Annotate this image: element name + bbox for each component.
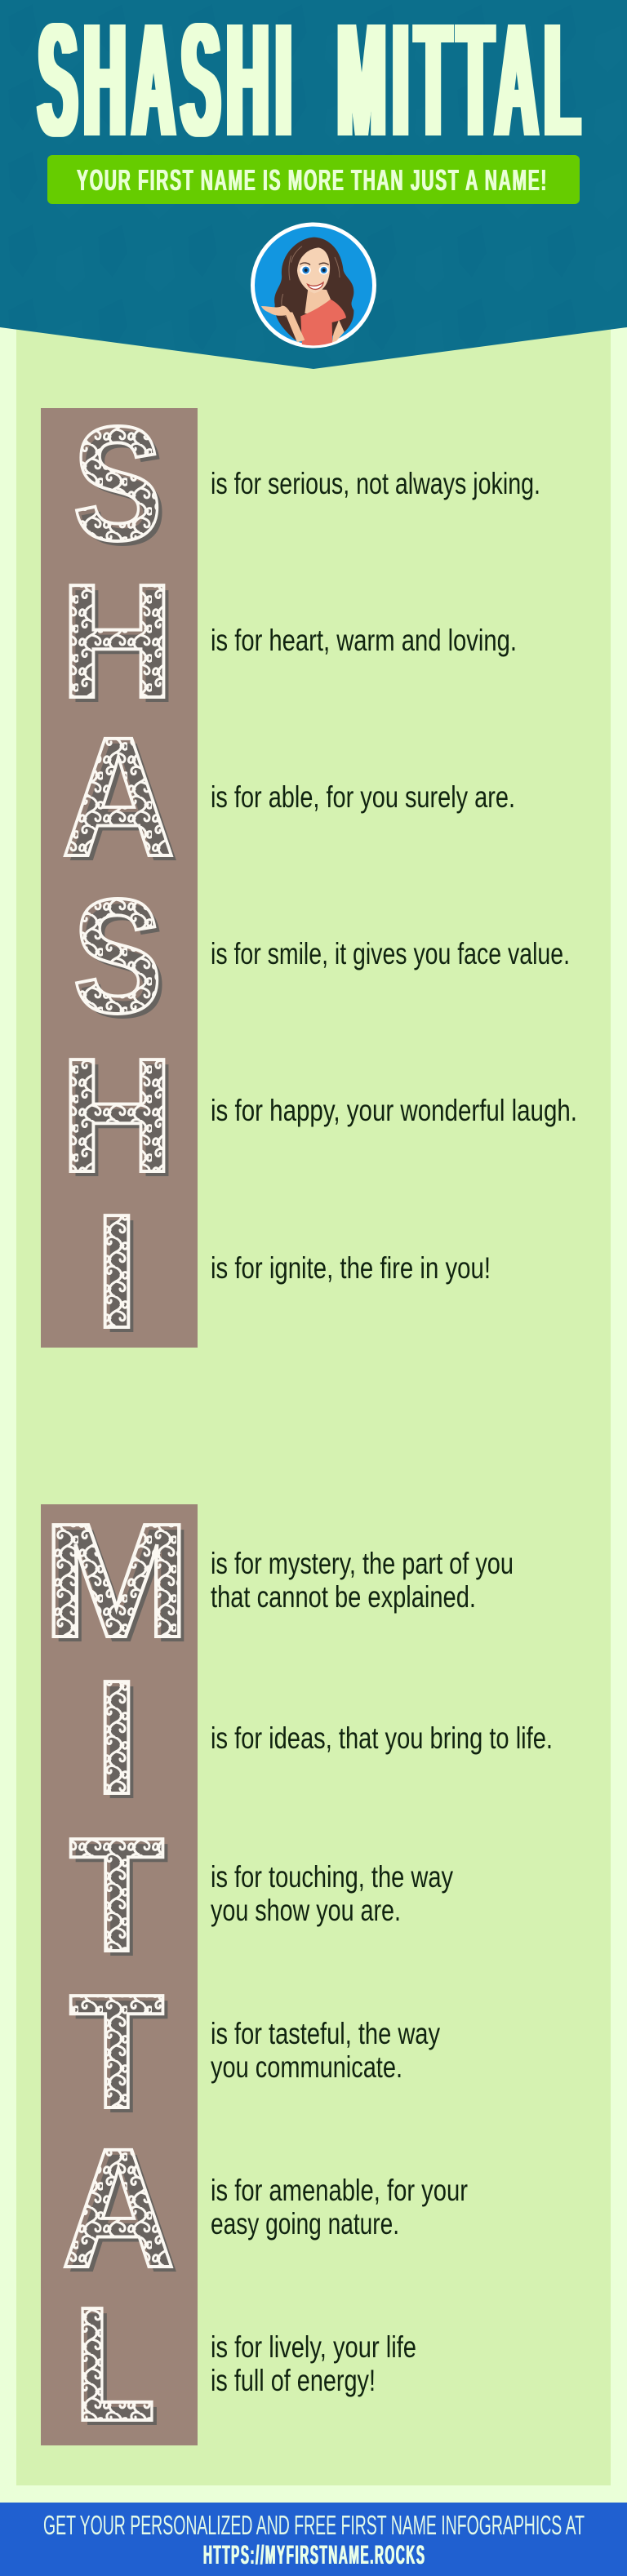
acrostic lines: MITTAL: is for mystery, the part of you (211, 1547, 514, 1580)
letter H: H (65, 1030, 180, 1211)
letter H: H (65, 556, 180, 737)
letter M: M (47, 1495, 196, 1677)
footer (0, 2503, 627, 2576)
acrostic lines: MITTAL: you show you are. (211, 1894, 401, 1927)
letter I: I (99, 1186, 145, 1367)
letter I: I (94, 1647, 140, 1828)
acrostic lines: SHASHI: is for able, for you surely are. (211, 780, 515, 814)
letter T: T (73, 1810, 170, 1991)
letter A: A (61, 2114, 176, 2303)
acrostic lines: MITTAL: easy going nature. (211, 2207, 399, 2241)
acrostic lines: MITTAL: is for lively, your life (211, 2330, 416, 2364)
letter panel: SHASHI (41, 393, 198, 1367)
letter S: S (78, 398, 167, 580)
avatar: cartoon woman in circle (253, 224, 374, 347)
letter L: L (73, 2274, 156, 2455)
letter S: S (73, 866, 162, 1047)
letter H: H (60, 551, 175, 732)
acrostic lines: MITTAL: is for amenable, for your (211, 2174, 468, 2207)
acrostic lines: SHASHI (211, 467, 577, 1285)
acrostic lines: MITTAL: you communicate. (211, 2050, 402, 2084)
letter I: I (94, 1181, 140, 1362)
letter S: S (73, 393, 162, 575)
acrostic lines: SHASHI: is for serious, not always joking. (211, 467, 540, 500)
letter T: T (73, 1966, 170, 2147)
acrostic lines: MITTAL (211, 1547, 553, 2397)
letter M: M (42, 1490, 191, 1672)
acrostic lines: SHASHI: is for heart, warm and loving. (211, 624, 517, 657)
letter panel: MITTAL (41, 1490, 198, 2460)
letter T: T (69, 1805, 165, 1986)
acrostic lines: MITTAL: is for tasteful, the way (211, 2017, 440, 2050)
letter S: S (78, 871, 167, 1052)
letter L: L (78, 2279, 161, 2460)
acrostic lines: MITTAL: is full of energy! (211, 2364, 376, 2397)
footer: HTTPS://MYFIRSTNAME.ROCKS (203, 2541, 426, 2570)
letter A: A (61, 703, 176, 892)
acrostic lines: MITTAL: that cannot be explained. (211, 1580, 476, 1614)
letter A: A (66, 2119, 180, 2308)
subtitle banner: YOUR FIRST NAME IS MORE THAN JUST A NAME! (77, 164, 548, 198)
subtitle banner (47, 155, 580, 204)
letter T: T (69, 1961, 165, 2143)
letter A: A (66, 708, 180, 897)
letter H: H (60, 1025, 175, 1206)
header banner (0, 0, 627, 369)
acrostic lines: MITTAL: is for touching, the way (211, 1860, 453, 1894)
acrostic lines: SHASHI: is for ignite, the fire in you! (211, 1251, 491, 1285)
letter I: I (99, 1652, 145, 1833)
